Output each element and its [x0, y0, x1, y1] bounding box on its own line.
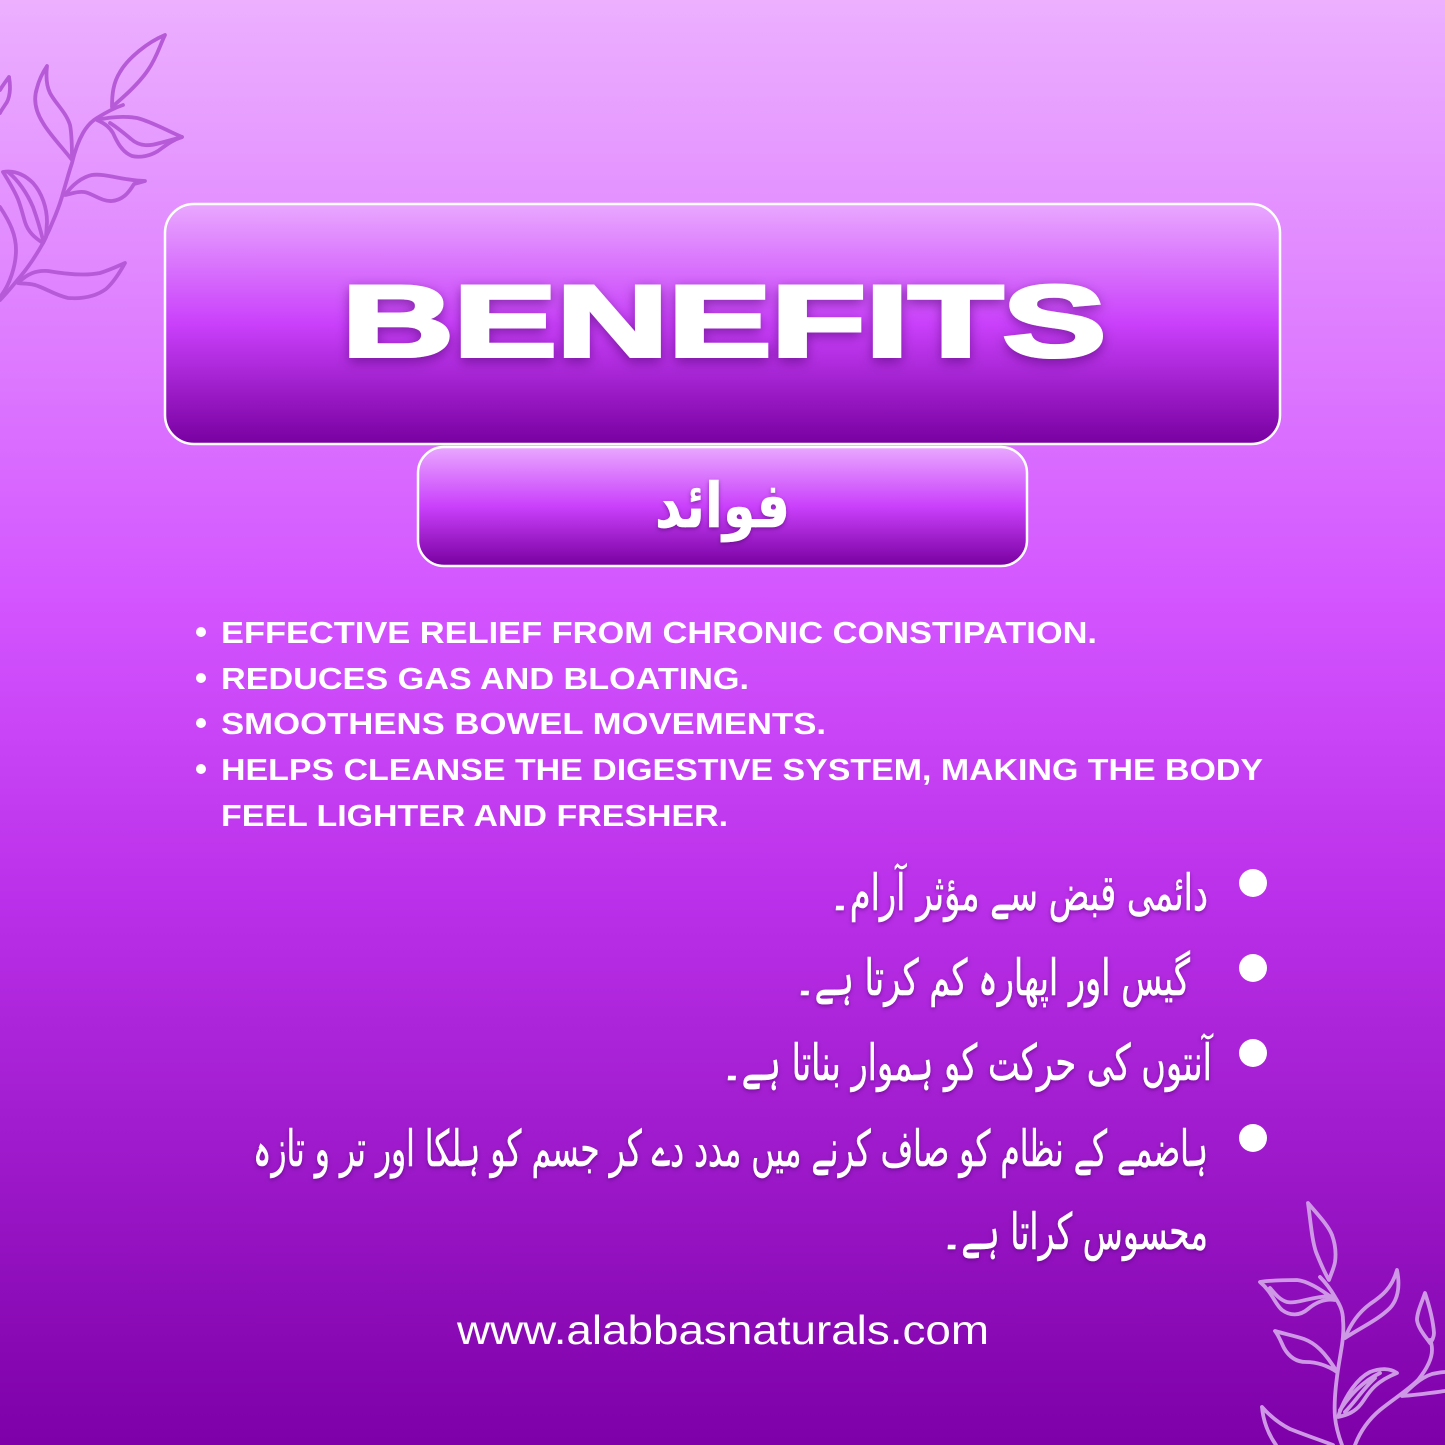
- icon: bottom-right leaf branch: [1260, 1203, 1445, 1445]
- Urdu list text: محسوس کراتا ہے۔: [942, 1203, 1208, 1261]
- icon: top-left leaf branch: [0, 35, 182, 300]
- Urdu bullets: [1239, 869, 1267, 1152]
- bullets: [196, 627, 206, 774]
- list text: HELPS CLEANSE THE DIGESTIVE SYSTEM, MAKING THE BODY: [221, 752, 1263, 787]
- heading: BENEFITS: BENEFITS: [342, 266, 1106, 378]
- Urdu list text: [253, 863, 1213, 1261]
- Urdu list text: دائمی قبض سے مؤثر آرام۔: [830, 863, 1208, 922]
- panel: BENEFITS title: [165, 204, 1280, 444]
- Urdu benefits list: [253, 863, 1267, 1261]
- Urdu list text: آنتوں کی حرکت کو ہموار بناتا ہے۔: [722, 1033, 1213, 1092]
- list text: EFFECTIVE RELIEF FROM CHRONIC CONSTIPATION.: [221, 615, 1097, 650]
- panel: Urdu title: [418, 447, 1027, 566]
- Urdu list text: گیس اور اپھارہ کم کرتا ہے۔: [795, 949, 1190, 1008]
- heading: Urdu benefits: فوائد: [655, 469, 790, 542]
- website URL: www.alabbasnaturals.com: [456, 1307, 989, 1353]
- English benefits list: [196, 615, 1263, 833]
- list text: SMOOTHENS BOWEL MOVEMENTS.: [221, 706, 826, 741]
- list text: FEEL LIGHTER AND FRESHER.: [221, 798, 728, 833]
- list text: REDUCES GAS AND BLOATING.: [221, 661, 749, 696]
- list text: [221, 615, 1263, 833]
